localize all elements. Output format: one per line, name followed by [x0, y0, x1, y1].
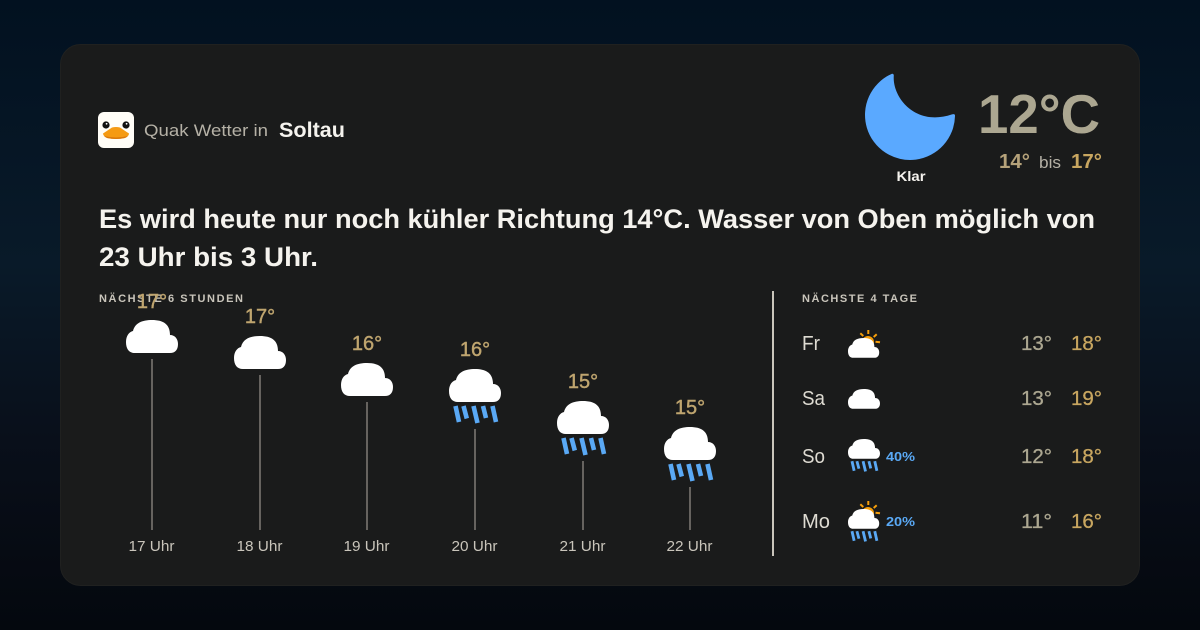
day: Sunday: [802, 439, 1102, 471]
hour 22: [664, 397, 716, 555]
condition label: Klar: [896, 168, 926, 184]
day: Monday: 11°: [1021, 511, 1052, 533]
day: Saturday: 19°: [1071, 388, 1102, 410]
hour 19: 16°: [352, 333, 382, 355]
hour 21: [557, 371, 609, 555]
day: Monday: Mo: [802, 511, 830, 533]
day: Friday: 13°: [1021, 333, 1052, 355]
icon: moon: [865, 74, 955, 160]
hour 19: [341, 333, 393, 555]
temperature range: 14°: [999, 151, 1030, 173]
location name: Soltau: [279, 119, 345, 142]
day: Sunday: 40%: [886, 449, 915, 464]
hour 17: 17 Uhr: [128, 539, 175, 555]
hour 20: 16°: [460, 339, 490, 361]
summary heading: 23 Uhr bis 3 Uhr.: [99, 242, 318, 272]
hour 18: 18 Uhr: [236, 539, 283, 555]
day: Sunday: 18°: [1071, 446, 1102, 468]
section label: NÄCHSTE 6 STUNDEN: [99, 292, 243, 305]
day: Saturday: [802, 388, 1102, 410]
hour 21: 21 Uhr: [560, 539, 606, 555]
day: Monday: [802, 501, 1102, 541]
panel: weather card: [60, 44, 1140, 586]
day: Friday: 18°: [1071, 333, 1102, 355]
summary heading: Es wird heute nur noch kühler Richtung 14°C. Wasser von Oben möglich von: [99, 204, 1095, 234]
day: Sunday: So: [802, 446, 825, 468]
section: next 4 days: [802, 292, 1102, 541]
section label: NÄCHSTE 4 TAGE: [802, 292, 917, 305]
temperature range: bis: [1039, 153, 1061, 172]
header: brand and location: [98, 112, 345, 148]
hour 18: 17°: [245, 306, 275, 328]
hour 17: 17°: [137, 291, 167, 313]
day: Monday: 16°: [1071, 511, 1102, 533]
hour 22: 22 Uhr: [666, 539, 713, 555]
hour 18: [234, 306, 286, 555]
summary heading: [99, 204, 1095, 272]
day: Sunday: 12°: [1021, 446, 1052, 468]
hour 22: 15°: [675, 397, 705, 419]
current conditions: [865, 74, 1102, 184]
day: Friday: Fr: [802, 333, 820, 355]
icon: duck logo: [98, 112, 134, 148]
hour 17: [126, 291, 178, 555]
day: Friday: [802, 330, 1102, 358]
hour 21: 15°: [568, 371, 598, 393]
temperature range: 17°: [1071, 151, 1102, 173]
hour 19: 19 Uhr: [344, 539, 390, 555]
day: Saturday: 13°: [1021, 388, 1052, 410]
hour 20: [449, 339, 501, 555]
current temperature: 12°C: [978, 83, 1100, 145]
section: next 6 hours: [99, 291, 716, 555]
day: Saturday: Sa: [802, 388, 826, 410]
temperature range: [999, 151, 1102, 173]
hour 20: 20 Uhr: [452, 539, 498, 555]
day: Monday: 20%: [886, 514, 915, 529]
brand text: Quak Wetter in: [144, 121, 268, 140]
